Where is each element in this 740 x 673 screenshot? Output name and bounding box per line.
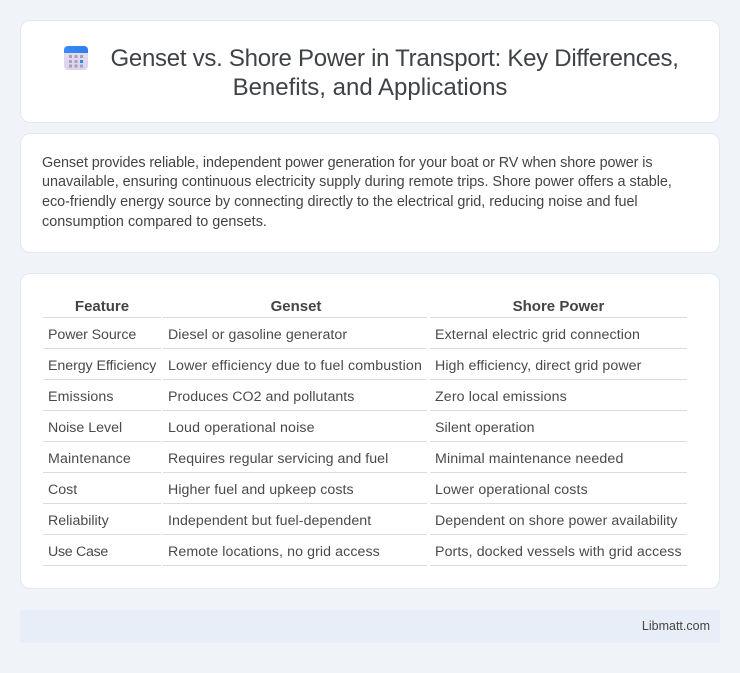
comparison table: High efficiency, direct grid power [435, 358, 641, 374]
summary text [42, 155, 672, 230]
footer text: Libmatt.com [642, 619, 710, 633]
title: Benefits, and Applications [233, 74, 507, 101]
title [110, 45, 679, 101]
comparison table: Remote locations, no grid access [168, 544, 380, 560]
comparison table: Loud operational noise [168, 420, 315, 436]
panel: header card [20, 20, 720, 123]
comparison table: External electric grid connection [435, 327, 640, 343]
comparison table: Produces CO2 and pollutants [168, 389, 354, 405]
comparison table: Lower operational costs [435, 482, 588, 498]
comparison table: Ports, docked vessels with grid access [435, 544, 682, 560]
panel: summary card [20, 133, 720, 253]
comparison table: Silent operation [435, 420, 535, 436]
comparison table: Cost [48, 482, 77, 498]
comparison table: Dependent on shore power availability [435, 513, 677, 529]
comparison table: Diesel or gasoline generator [168, 327, 347, 343]
summary text: unavailable, ensuring continuous electricity supply during remote trips. Shore power offers a stable, [42, 174, 672, 190]
comparison table: Zero local emissions [435, 389, 567, 405]
summary text: eco-friendly energy source by connecting directly to the electrical grid, reducing noise and fuel [42, 194, 638, 210]
comparison table: Independent but fuel-dependent [168, 513, 371, 529]
comparison table: Use Case [48, 544, 108, 560]
comparison table: Higher fuel and upkeep costs [168, 482, 354, 498]
comparison table: Power Source [48, 327, 136, 343]
comparison table: Noise Level [48, 420, 122, 436]
panel: comparison table card [20, 273, 720, 589]
comparison table: Reliability [48, 513, 109, 529]
title: Genset vs. Shore Power in Transport: Key Differences, [110, 45, 679, 72]
comparison table: Maintenance [48, 451, 131, 467]
summary text: consumption compared to gensets. [42, 214, 267, 230]
icon: calendar [64, 46, 88, 70]
comparison table: Emissions [48, 389, 114, 405]
comparison table: Feature [75, 298, 129, 315]
comparison table: Minimal maintenance needed [435, 451, 623, 467]
comparison table [43, 298, 687, 566]
comparison table: Requires regular servicing and fuel [168, 451, 388, 467]
comparison table: Lower efficiency due to fuel combustion [168, 358, 422, 374]
footer bar [20, 610, 720, 643]
comparison table: Genset [271, 298, 321, 315]
comparison table: Shore Power [513, 298, 604, 315]
summary text: Genset provides reliable, independent power generation for your boat or RV when shore power is [42, 155, 652, 171]
comparison table: Energy Efficiency [48, 358, 156, 374]
